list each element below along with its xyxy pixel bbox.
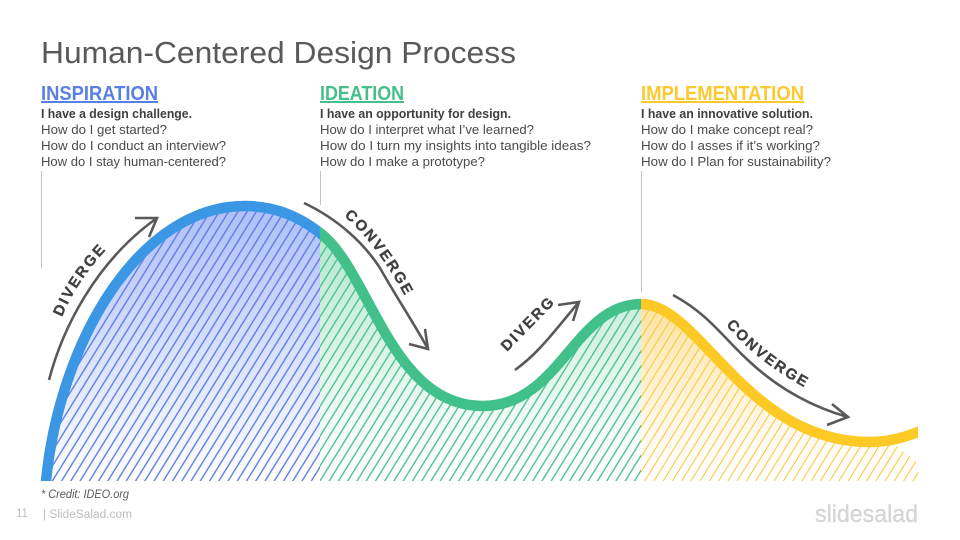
text block: implementation: How do I make concept real? bbox=[641, 123, 813, 137]
text block: implementation: How do I asses if it’s working? bbox=[641, 139, 820, 153]
text block: inspiration: How do I get started? bbox=[41, 123, 167, 137]
text block: inspiration: How do I stay human-centered? bbox=[41, 155, 226, 169]
chart: blue inspiration area bbox=[46, 206, 320, 481]
text block: ideation: How do I turn my insights into tangible ideas? bbox=[320, 139, 591, 153]
text block: ideation: How do I interpret what I’ve learned? bbox=[320, 123, 534, 137]
text block: ideation: I have an opportunity for design. bbox=[320, 107, 511, 121]
label: diverge 2: DIVERG bbox=[500, 298, 553, 352]
arrow: converge 1 bbox=[304, 203, 428, 349]
text block: inspiration: I have a design challenge. bbox=[41, 107, 192, 121]
curve: blue segment bbox=[40, 200, 320, 481]
arrow: diverge 1 bbox=[49, 218, 157, 380]
footer site: | SlideSalad.com bbox=[43, 509, 132, 521]
title: Human-Centered Design Process bbox=[41, 35, 516, 70]
text block: ideation bbox=[320, 83, 591, 169]
curve: yellow segment bbox=[620, 304, 940, 442]
text block: inspiration: INSPIRATION bbox=[41, 83, 158, 105]
curve: green segment bbox=[320, 226, 641, 412]
logo wordmark: slidesalad bbox=[815, 501, 918, 528]
text block: implementation: I have an innovative solution. bbox=[641, 107, 813, 121]
page number: 11 bbox=[16, 508, 28, 520]
text block: inspiration: How do I conduct an interview? bbox=[41, 139, 226, 153]
chart: green ideation area bbox=[320, 233, 641, 481]
arrow: converge 2 bbox=[673, 295, 848, 425]
chart: yellow implementation area bbox=[641, 304, 918, 481]
text block: ideation: How do I make a prototype? bbox=[320, 155, 485, 169]
text block: implementation bbox=[641, 83, 831, 169]
arrow: diverge 2 bbox=[515, 302, 579, 370]
text block: implementation: How do I Plan for sustainability? bbox=[641, 155, 831, 169]
label: converge 2: CONVERGE bbox=[728, 320, 809, 388]
text block: inspiration bbox=[41, 83, 226, 169]
credit note: * Credit: IDEO.org bbox=[41, 487, 129, 501]
text block: ideation: IDEATION bbox=[320, 83, 404, 105]
text block: implementation: IMPLEMENTATION bbox=[641, 83, 804, 105]
label: converge 1: CONVERGE bbox=[346, 210, 414, 296]
label: diverge 1: DIVERGE bbox=[52, 244, 106, 316]
